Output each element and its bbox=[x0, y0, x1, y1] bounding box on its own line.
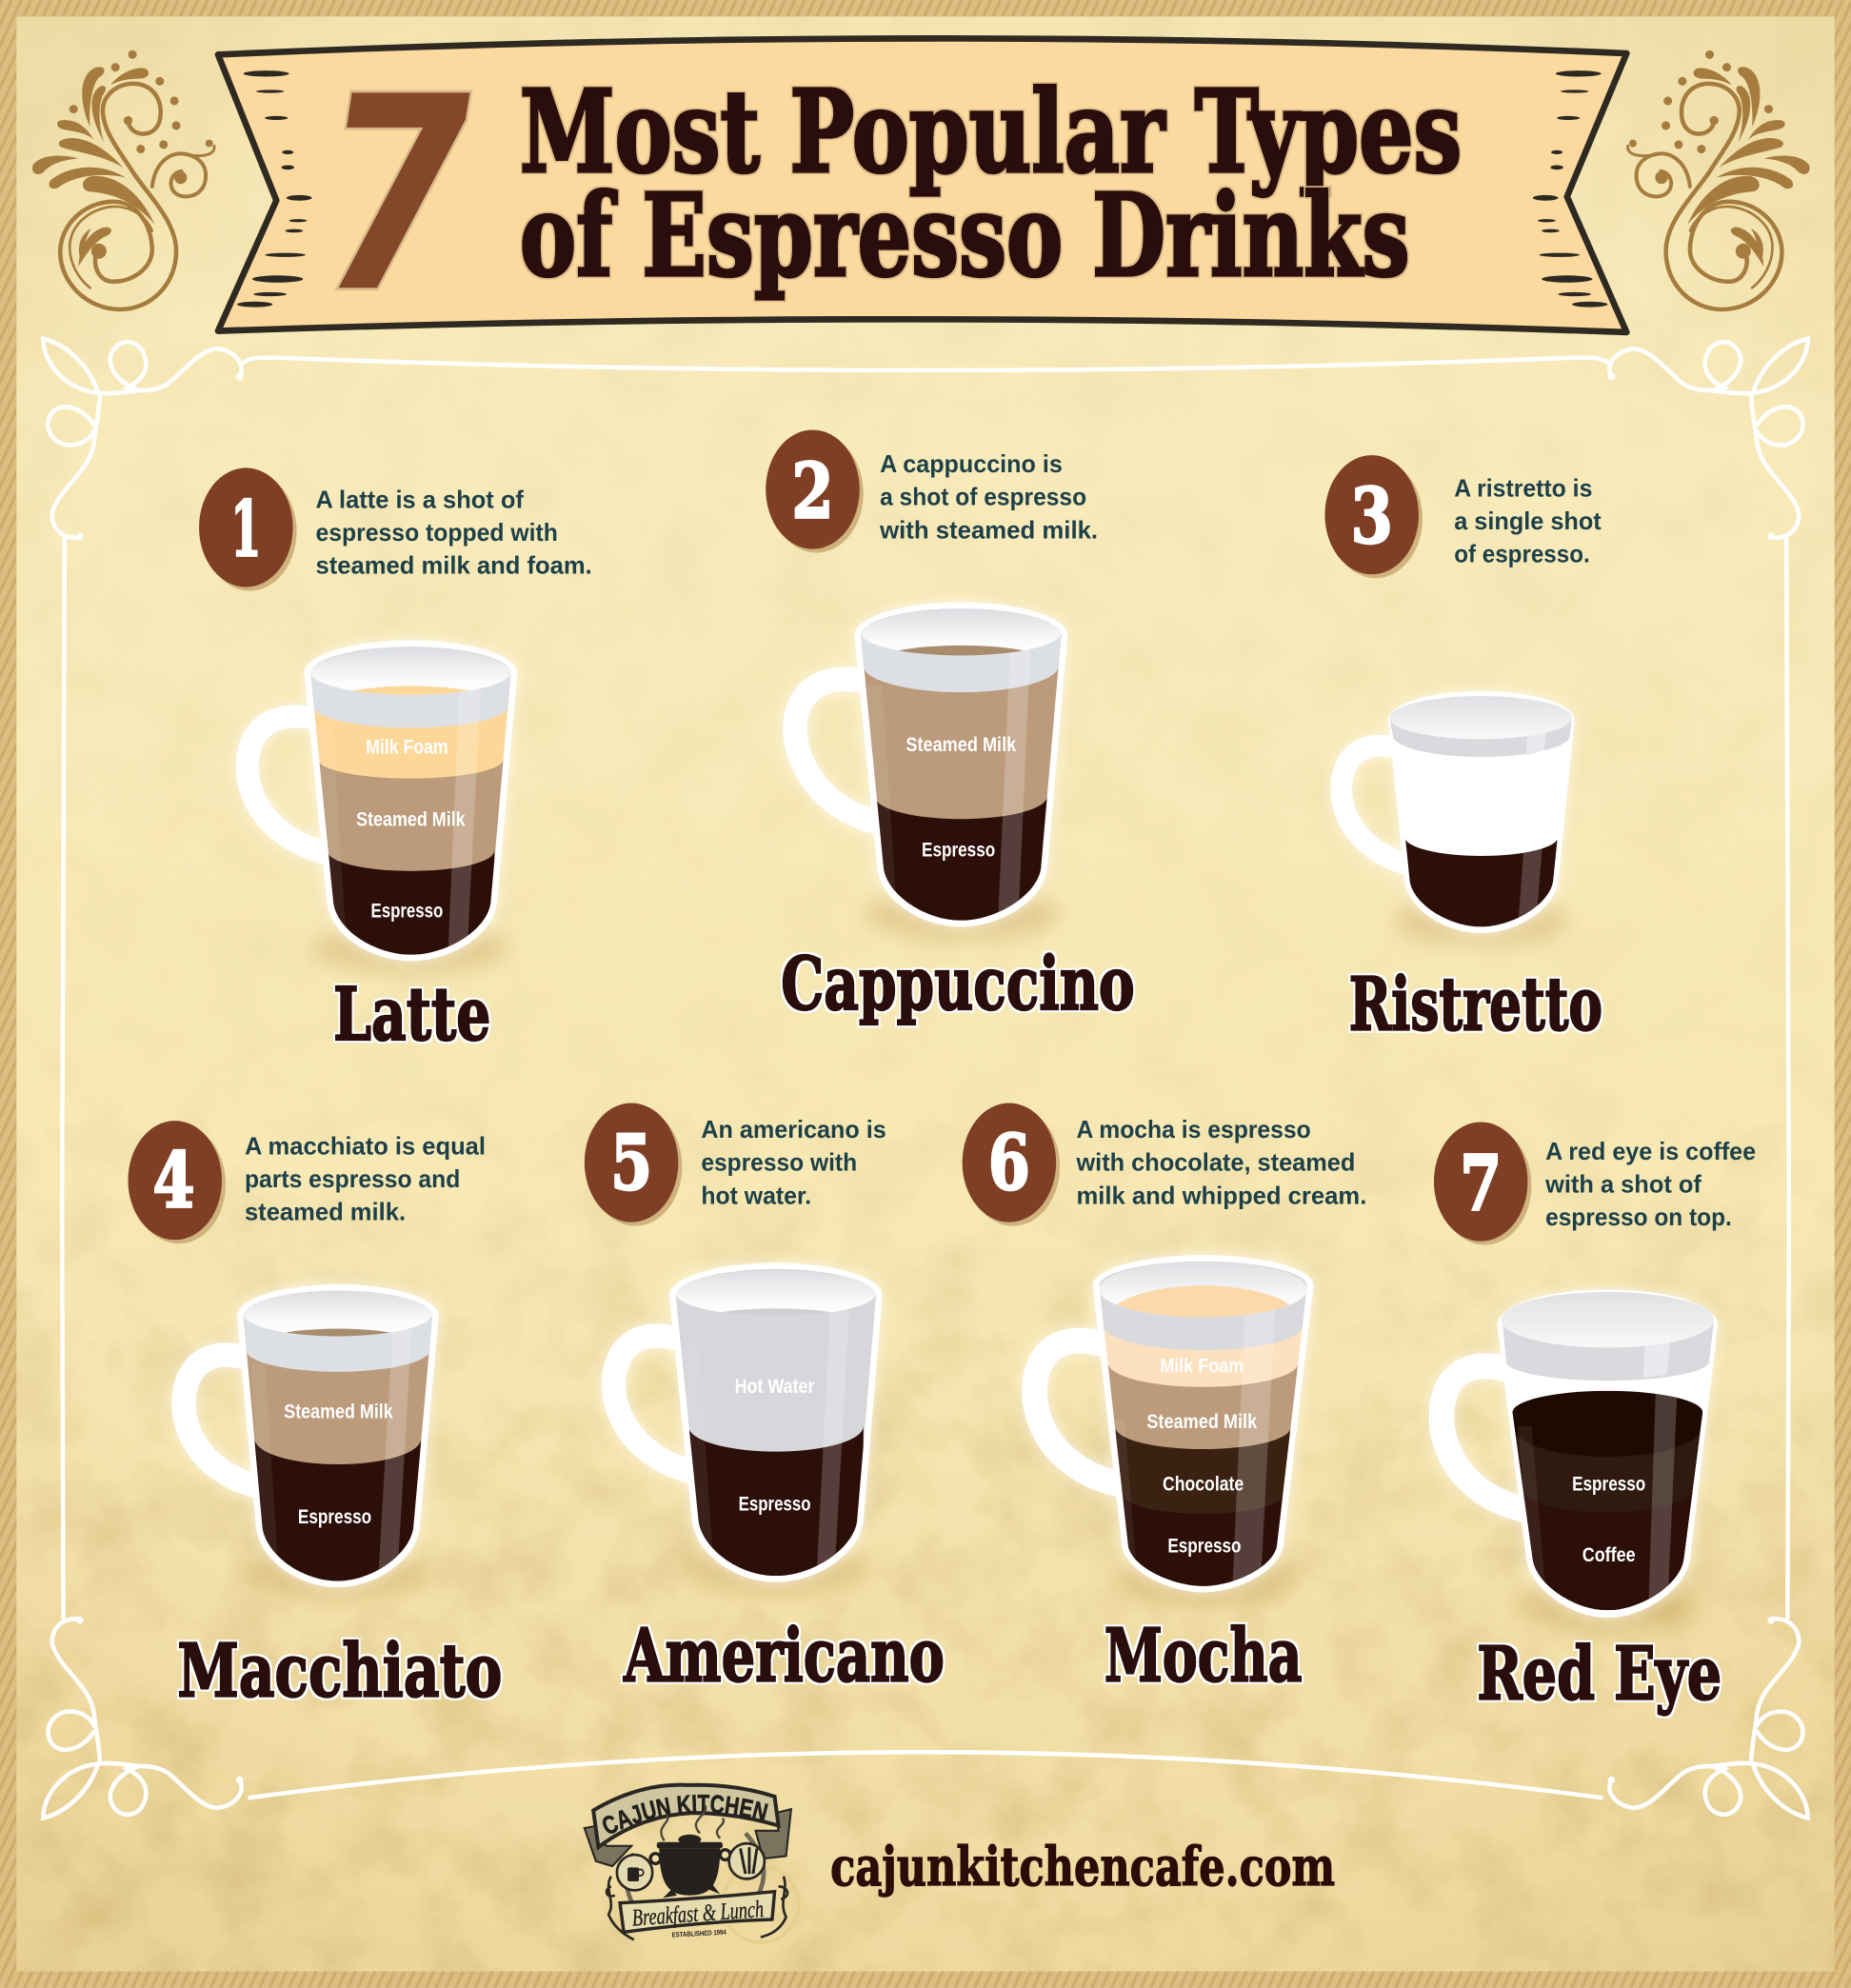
layer labels: Steamed Milk bbox=[356, 808, 466, 831]
description: steamed milk and foam. bbox=[316, 551, 592, 580]
description: espresso with bbox=[701, 1148, 857, 1177]
shadow bbox=[1511, 1580, 1704, 1630]
shadow bbox=[244, 1549, 431, 1600]
number badge 1 bbox=[199, 467, 297, 591]
panel: mocha bbox=[963, 1103, 1366, 1700]
description bbox=[1075, 1115, 1366, 1209]
icon: left flourish bbox=[32, 50, 214, 309]
layer labels: Hot Water bbox=[735, 1375, 814, 1398]
layer labels: Chocolate bbox=[1163, 1472, 1244, 1495]
logo banner tails bbox=[585, 1809, 791, 1866]
title numeral 7: 7 bbox=[320, 39, 473, 354]
description: with steamed milk. bbox=[879, 515, 1098, 544]
layer labels: Steamed Milk bbox=[1146, 1410, 1257, 1433]
drink name: Mocha bbox=[1105, 1613, 1302, 1700]
description bbox=[701, 1115, 886, 1209]
number badge 6 bbox=[963, 1103, 1060, 1226]
drink name: Latte bbox=[333, 971, 490, 1058]
icon: right flourish bbox=[1628, 50, 1810, 309]
layer labels: Espresso bbox=[1167, 1535, 1242, 1558]
layer labels: Espresso bbox=[370, 899, 443, 922]
number badge 5 bbox=[585, 1103, 682, 1226]
description bbox=[879, 449, 1098, 544]
panel: cappuccino bbox=[766, 429, 1135, 1027]
description: A mocha is espresso bbox=[1076, 1115, 1311, 1143]
shadow bbox=[312, 923, 509, 974]
website: cajunkitchencafe.com bbox=[830, 1836, 1335, 1899]
description: of espresso. bbox=[1454, 540, 1590, 568]
title bbox=[520, 66, 1462, 302]
white ornamental frame bbox=[43, 339, 1808, 1818]
logo lower banner bbox=[620, 1892, 775, 1932]
layer labels: Coffee bbox=[1582, 1543, 1636, 1566]
number badge 2 bbox=[766, 429, 864, 553]
number badge 4 bbox=[128, 1121, 226, 1243]
number badge 6: 6 bbox=[988, 1118, 1030, 1207]
logo arches bbox=[627, 1833, 764, 1905]
description: espresso on top. bbox=[1545, 1203, 1732, 1231]
mug bbox=[1034, 1249, 1324, 1598]
description bbox=[1544, 1137, 1756, 1231]
description: A latte is a shot of bbox=[316, 485, 524, 513]
description: A cappuccino is bbox=[880, 449, 1063, 478]
icon: pot bbox=[650, 1835, 730, 1898]
logo name: CAJUN KITCHEN bbox=[602, 1794, 768, 1834]
title: of Espresso Drinks bbox=[520, 169, 1410, 302]
shadow bbox=[1109, 1555, 1297, 1605]
number badge 3 bbox=[1324, 455, 1423, 578]
mug bbox=[184, 1268, 450, 1591]
title: Most Popular Types bbox=[520, 66, 1462, 198]
description: parts espresso and bbox=[245, 1164, 460, 1193]
layer labels: Steamed Milk bbox=[906, 733, 1016, 756]
mug bbox=[795, 596, 1078, 932]
layer labels bbox=[356, 736, 466, 922]
layer labels bbox=[1572, 1472, 1645, 1566]
drink name: Macchiato bbox=[177, 1628, 502, 1715]
mug bbox=[248, 634, 520, 964]
description: a shot of espresso bbox=[880, 483, 1086, 511]
mug bbox=[1342, 691, 1575, 938]
number badge 5: 5 bbox=[610, 1118, 652, 1207]
shadow bbox=[1392, 898, 1569, 944]
description: hot water. bbox=[701, 1181, 811, 1209]
drink name: Red Eye bbox=[1477, 1630, 1722, 1717]
description: steamed milk. bbox=[245, 1198, 406, 1226]
description bbox=[245, 1131, 486, 1226]
layer labels: Milk Foam bbox=[366, 736, 448, 759]
number badge 7 bbox=[1434, 1122, 1531, 1245]
logo upper banner bbox=[593, 1785, 779, 1847]
layer labels: Espresso bbox=[739, 1493, 810, 1516]
icon: coffee medallion bbox=[617, 1855, 652, 1890]
panel: americano bbox=[585, 1103, 945, 1700]
number badge 3: 3 bbox=[1351, 471, 1393, 561]
drink name: Ristretto bbox=[1349, 961, 1602, 1047]
layer labels: Espresso bbox=[922, 839, 995, 862]
icon: steam bbox=[661, 1805, 724, 1840]
description: milk and whipped cream. bbox=[1076, 1181, 1366, 1209]
layer labels: Espresso bbox=[1572, 1472, 1645, 1495]
layer labels bbox=[284, 1400, 393, 1528]
layer labels: Milk Foam bbox=[1160, 1354, 1244, 1377]
panel: ristretto bbox=[1324, 455, 1602, 1047]
drink name: Americano bbox=[623, 1613, 945, 1700]
logo ornaments bbox=[607, 1877, 787, 1939]
layer labels bbox=[735, 1375, 814, 1516]
logo tagline: Breakfast & Lunch bbox=[631, 1896, 765, 1932]
number badge 2: 2 bbox=[792, 446, 833, 535]
layer labels: Steamed Milk bbox=[284, 1400, 393, 1422]
layer labels: Espresso bbox=[298, 1505, 371, 1528]
icon: cutlery medallion bbox=[729, 1843, 765, 1879]
description bbox=[316, 485, 592, 580]
description: with chocolate, steamed bbox=[1075, 1148, 1355, 1177]
description: An americano is bbox=[701, 1115, 886, 1143]
mug bbox=[613, 1255, 887, 1584]
shadow bbox=[862, 888, 1060, 940]
shadow bbox=[680, 1544, 872, 1595]
logo established: ESTABLISHED 1994 bbox=[671, 1928, 727, 1939]
panel: latte bbox=[199, 467, 592, 1058]
coffee ring stain bbox=[723, 1866, 799, 1942]
description: with a shot of bbox=[1544, 1169, 1702, 1198]
panel: macchiato bbox=[128, 1121, 502, 1715]
description bbox=[1454, 473, 1602, 568]
description: A macchiato is equal bbox=[245, 1131, 486, 1160]
layer labels bbox=[906, 733, 1016, 862]
mug bbox=[1442, 1289, 1718, 1618]
drink name: Cappuccino bbox=[781, 941, 1135, 1027]
description: espresso topped with bbox=[316, 518, 558, 547]
description: A ristretto is bbox=[1454, 473, 1592, 502]
number badge 4: 4 bbox=[152, 1136, 194, 1225]
description: a single shot bbox=[1454, 507, 1602, 535]
logo: Cajun Kitchen bbox=[583, 1782, 800, 1944]
number badge 1: 1 bbox=[230, 484, 261, 573]
description: A red eye is coffee bbox=[1545, 1137, 1756, 1165]
layer labels bbox=[1146, 1354, 1257, 1558]
number badge 7: 7 bbox=[1460, 1138, 1502, 1227]
panel: red eye bbox=[1434, 1122, 1756, 1717]
title banner bbox=[218, 38, 1626, 332]
